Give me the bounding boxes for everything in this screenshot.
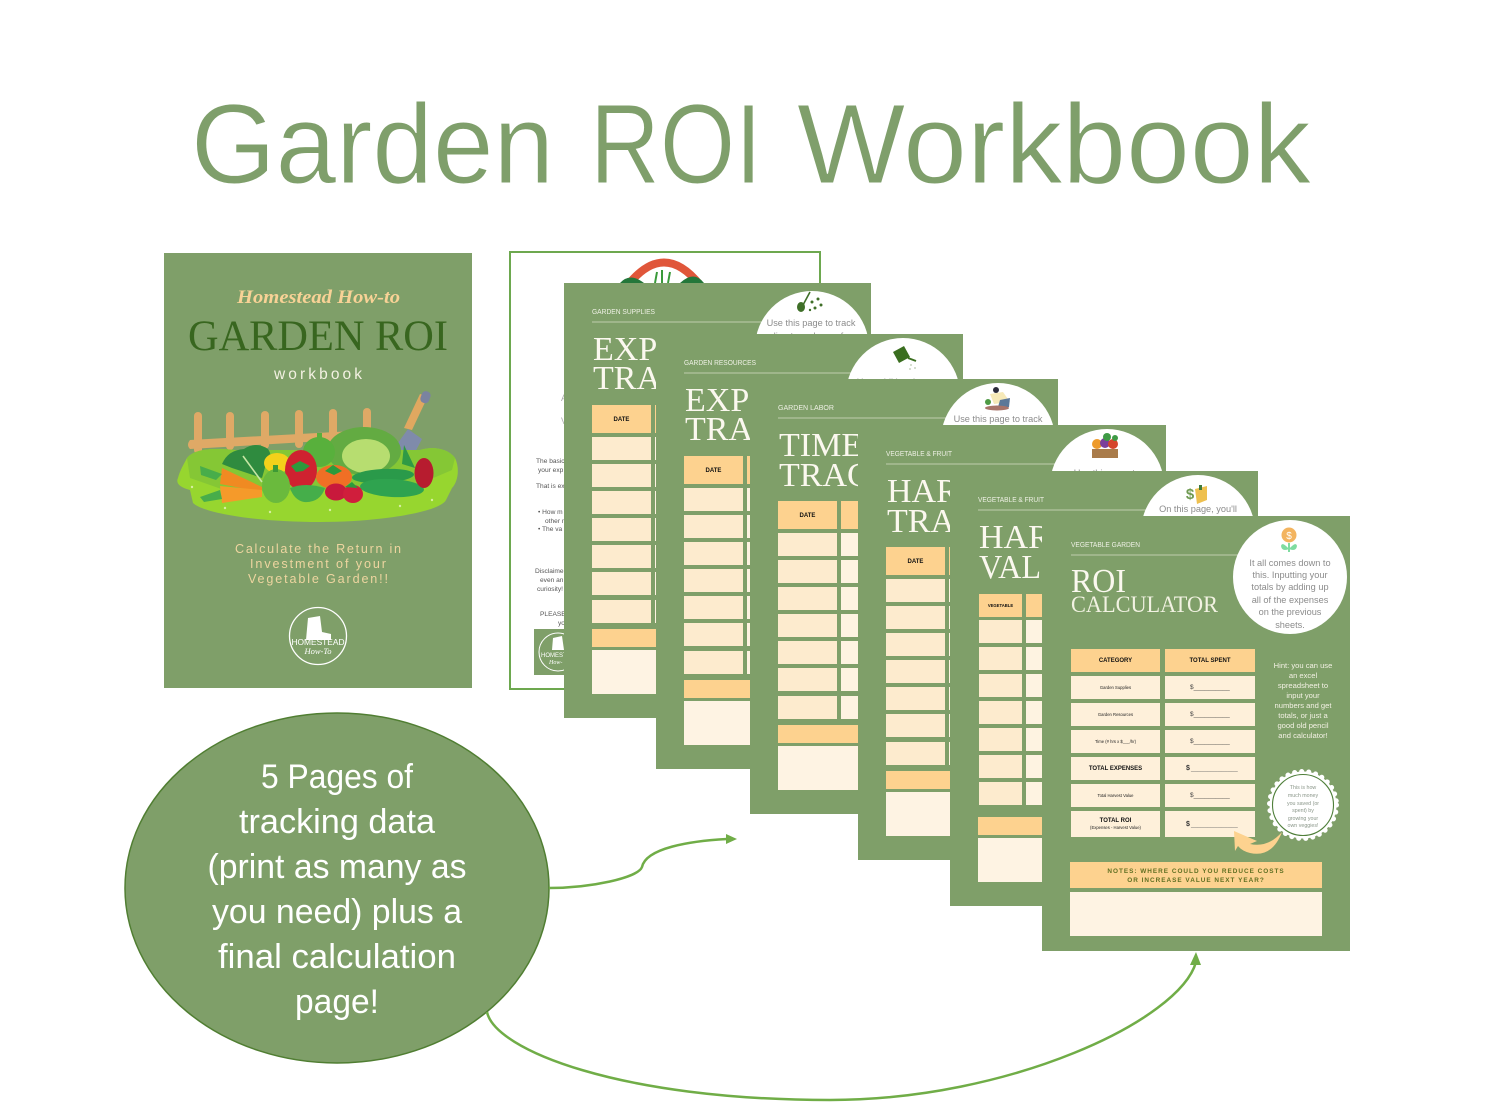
- page title: EXPENSE: [685, 382, 834, 419]
- callout circle with text: on the previous: [1259, 607, 1322, 617]
- callout: tracking data oval: 5 Pages of: [261, 758, 414, 796]
- data table: [592, 405, 844, 694]
- calculator table: CATEGORY: [1099, 658, 1132, 664]
- page title: HARVEST: [979, 519, 1133, 556]
- calculator table: Garden Supplies: [1100, 685, 1131, 690]
- page title: [779, 427, 938, 494]
- panel: harvest value page: [950, 471, 1258, 906]
- callout circle with text: all of the expenses: [1252, 595, 1329, 605]
- data table: VEGETABLE: [988, 603, 1013, 608]
- intro text fragments: Disclaimer: [535, 568, 567, 575]
- callout: tracking data oval: you need) plus a: [212, 893, 462, 931]
- scalloped badge: much money: [1288, 793, 1319, 799]
- calculator table: TOTAL ROI: [1100, 818, 1132, 824]
- data table: DATE: [614, 417, 629, 423]
- panel: ROI calculator page: [1042, 516, 1350, 951]
- title: [191, 81, 1312, 207]
- page label: VEGETABLE & FRUIT: [978, 497, 1045, 504]
- data table: DATE: [706, 468, 721, 474]
- hint text: numbers and get: [1274, 701, 1332, 710]
- page label: GARDEN RESOURCES: [684, 360, 756, 367]
- scalloped badge: [1270, 772, 1336, 838]
- calculator table: Total Harvest Value: [1098, 793, 1134, 798]
- panel: expense tracker page, garden resources: [656, 334, 963, 769]
- intro text fragments: [535, 393, 569, 627]
- callout circle: [846, 338, 960, 452]
- cover tagline: [235, 542, 401, 586]
- cover tagline: Vegetable Garden!!: [248, 572, 388, 586]
- page title: TRACKER: [593, 360, 752, 397]
- page label: VEGETABLE & FRUIT: [886, 451, 953, 458]
- panel: workbook cover: [164, 253, 472, 688]
- intro text fragments: other n: [545, 518, 566, 525]
- page title: [1071, 563, 1219, 617]
- callout circle with text: sheets.: [1275, 620, 1305, 630]
- calculator table: ______________: [1190, 766, 1238, 772]
- title: Garden: [191, 81, 554, 207]
- intro text fragments: The basic: [536, 458, 565, 465]
- icon: shovel and seeds: [797, 292, 822, 312]
- icon: garden vegetables illustration: [177, 390, 458, 522]
- intro text fragments: • How m: [538, 509, 563, 516]
- page title: VAL: [979, 549, 1041, 586]
- calculator table: $__________: [1190, 738, 1230, 745]
- intro text fragments: yo: [558, 620, 565, 627]
- calculator table: $__________: [1190, 684, 1230, 691]
- page title: TRACKER: [779, 457, 938, 494]
- calculator table: $: [1186, 821, 1190, 828]
- calculator table: Time (# hrs x $___/hr): [1095, 739, 1137, 744]
- notes header: OR INCREASE VALUE NEXT YEAR?: [1127, 877, 1265, 884]
- calculator table: Garden Resources: [1098, 712, 1133, 717]
- page title: [979, 519, 1133, 586]
- cover subheading: workbook: [273, 366, 362, 383]
- intro text fragments: A: [561, 393, 567, 403]
- calculator table: [1071, 649, 1255, 837]
- data table: [978, 594, 1230, 882]
- scalloped badge: spent) by: [1292, 808, 1314, 814]
- page title: HARVEST: [887, 473, 1041, 510]
- callout circle with text: [1233, 520, 1347, 634]
- intro text fragments: curiosity!: [537, 586, 563, 593]
- page title: TIME: [779, 427, 862, 464]
- hint text: spreadsheet to: [1278, 681, 1328, 690]
- callout text: Use this page to track: [954, 414, 1043, 424]
- page label: GARDEN LABOR: [778, 405, 834, 412]
- notes header: NOTES: WHERE COULD YOU REDUCE COSTS: [1107, 868, 1285, 875]
- page label: VEGETABLE GARDEN: [1071, 542, 1140, 549]
- icon: gardener: [985, 387, 1010, 410]
- callout circle: [755, 291, 869, 405]
- icon: Homestead How-to logo: How-To: [303, 646, 332, 656]
- icon: dollar and grocery bag: $: [1186, 486, 1195, 503]
- title: ROI: [590, 81, 762, 207]
- arrow: oval to calculator page: [487, 952, 1201, 1100]
- calculator table: TOTAL SPENT: [1189, 658, 1231, 664]
- data table: [778, 501, 1030, 790]
- scalloped badge: you saved (or: [1287, 801, 1319, 807]
- intro text fragments: PLEASE: [540, 611, 566, 618]
- callout: tracking data oval: (print as many as: [208, 848, 466, 886]
- intro page logo: How-: [548, 660, 562, 666]
- page title: CALCULATOR: [1071, 592, 1219, 617]
- callout: tracking data oval: page!: [295, 983, 379, 1021]
- cover brand script: Homestead How-to: [236, 287, 400, 308]
- page title: [887, 473, 1046, 540]
- data table: DATE: [800, 513, 815, 519]
- callout text: Use additional costs to: [857, 377, 949, 387]
- intro page logo: HOMEST: [541, 653, 567, 659]
- calculator table: $__________: [1190, 711, 1230, 718]
- scalloped badge: own veggies!: [1288, 823, 1318, 829]
- callout circle: [941, 383, 1055, 497]
- callout circle: [1050, 429, 1164, 543]
- cover heading: GARDEN ROI: [188, 313, 448, 360]
- data table: [886, 547, 1138, 836]
- hint text: Hint: you can use: [1274, 661, 1332, 670]
- page title: TRACKER: [887, 503, 1046, 540]
- data table: DATE: [908, 559, 923, 565]
- calculator table: TOTAL EXPENSES: [1089, 766, 1142, 772]
- callout circle with text: totals by adding up: [1251, 582, 1329, 592]
- page title: TRACKER: [685, 411, 844, 448]
- hint text: [1274, 661, 1332, 740]
- panel: time tracker page, garden labor: [750, 379, 1058, 814]
- page label: GARDEN SUPPLIES: [592, 309, 655, 316]
- page title: [685, 382, 844, 448]
- icon: vegetable crate: [1092, 433, 1118, 458]
- notes header: [1070, 862, 1322, 888]
- panel: harvest tracker page: [858, 425, 1166, 860]
- title: Workbook: [797, 81, 1312, 207]
- callout: tracking data oval: tracking data: [239, 803, 435, 841]
- icon: money flower: $: [1286, 531, 1292, 542]
- scalloped badge: growing your: [1288, 816, 1318, 822]
- page title: EXPENSE: [593, 331, 742, 368]
- callout text: Use this page to: [1074, 468, 1140, 478]
- calculator table: ______________: [1190, 822, 1238, 828]
- intro text fragments: even an: [540, 577, 564, 584]
- intro text fragments: That is exp: [536, 483, 569, 490]
- hint text: totals, or just a: [1278, 711, 1328, 720]
- notes box: [1070, 892, 1322, 936]
- callout circle: [1141, 475, 1255, 589]
- calculator table: (Expenses - Harvest Value): [1090, 825, 1142, 830]
- arrow: oval to tracking pages: [549, 834, 737, 888]
- callout circle with text: this. Inputting your: [1252, 570, 1328, 580]
- icon: Homestead How-to logo: HOMESTEAD: [291, 637, 345, 647]
- icon: dollar and grocery bag: [1186, 485, 1207, 504]
- callout: tracking data oval: final calculation: [218, 938, 456, 976]
- hint text: input your: [1286, 691, 1320, 700]
- scalloped badge: This is how: [1290, 785, 1316, 791]
- panel: intro page: [510, 252, 820, 689]
- callout text: Use this page to track: [767, 318, 856, 328]
- intro text fragments: V: [561, 416, 567, 426]
- icon: watering can: [893, 346, 916, 370]
- arrow: badge to total ROI: [1234, 831, 1282, 854]
- page title: [593, 331, 752, 397]
- callout text: On this page, you'll: [1159, 504, 1237, 514]
- panel: expense tracker page, garden supplies: direct purchases for: [771, 331, 851, 341]
- intro text fragments: your exp: [538, 467, 564, 474]
- page title: ROI: [1071, 563, 1126, 600]
- hint text: an excel: [1289, 671, 1317, 680]
- calculator table: $__________: [1190, 792, 1230, 799]
- calculator table: $: [1186, 765, 1190, 772]
- hint text: and calculator!: [1278, 731, 1328, 740]
- hint text: good old pencil: [1277, 721, 1329, 730]
- cover tagline: Calculate the Return in: [235, 542, 401, 556]
- icon: Homestead How-to logo: [290, 608, 346, 664]
- icon: garden arch: [620, 262, 704, 285]
- intro text fragments: • The va: [538, 526, 563, 533]
- intro page logo: [534, 629, 577, 675]
- panel: expense tracker page, garden supplies: [564, 283, 871, 718]
- cover tagline: Investment of your: [250, 557, 386, 571]
- data table: [684, 456, 936, 745]
- callout circle with text: It all comes down to: [1249, 558, 1331, 568]
- callout: tracking data oval: [125, 713, 549, 1063]
